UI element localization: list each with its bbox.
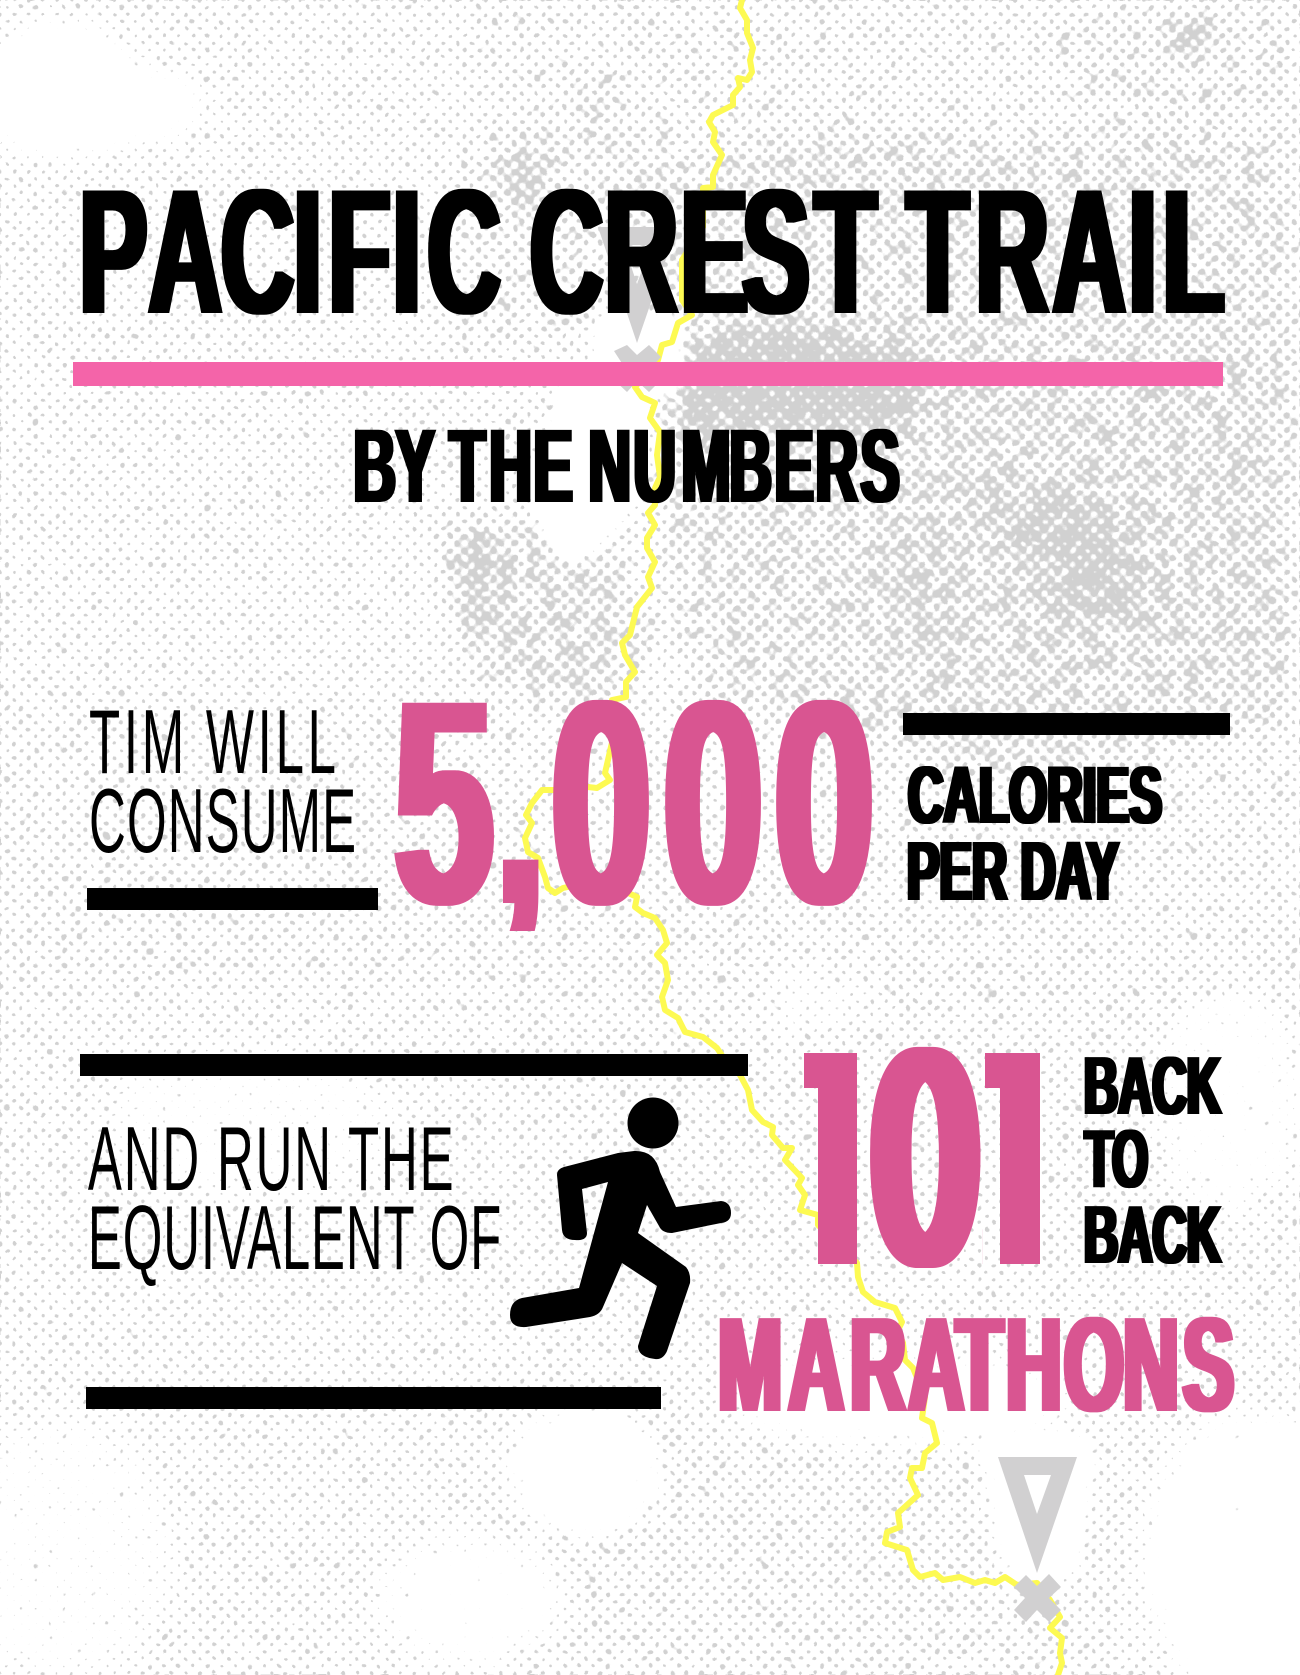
big number 101: 101 [760, 931, 1087, 1348]
text: and run the equivalent of: EQUIVALENT OF [88, 1186, 501, 1289]
text: back to back: TO [1085, 1112, 1148, 1205]
text: back to back [1084, 1039, 1221, 1281]
word: marathons: MARATHONS [718, 1291, 1234, 1440]
text: calories per day: PER DAY [907, 824, 1119, 918]
text: Tim will consume [89, 690, 356, 872]
big number 5,000: 5,000 [394, 641, 874, 966]
map marker: start triangle and X [598, 227, 677, 392]
text: calories per day [907, 750, 1162, 918]
bar above calories [903, 713, 1230, 735]
bar above marathon line [80, 1054, 748, 1076]
pink divider bar [73, 362, 1223, 386]
text: and run the equivalent of: AND RUN THE [88, 1107, 454, 1210]
yellow trail line [525, 0, 1062, 1675]
bar under consume [87, 888, 378, 910]
big number 101 [804, 1046, 1040, 1268]
map marker: end triangle and X [998, 1457, 1077, 1622]
text: Tim will consume: TIM WILL [89, 690, 336, 793]
bar below run text [86, 1387, 661, 1409]
title: PACIFIC CREST TRAIL [80, 152, 1225, 351]
text: Tim will consume: CONSUME [89, 769, 356, 872]
subtitle: BY THE NUMBERS [354, 408, 900, 525]
icon: running figure [510, 1098, 731, 1359]
text: and run the equivalent of [88, 1107, 501, 1289]
